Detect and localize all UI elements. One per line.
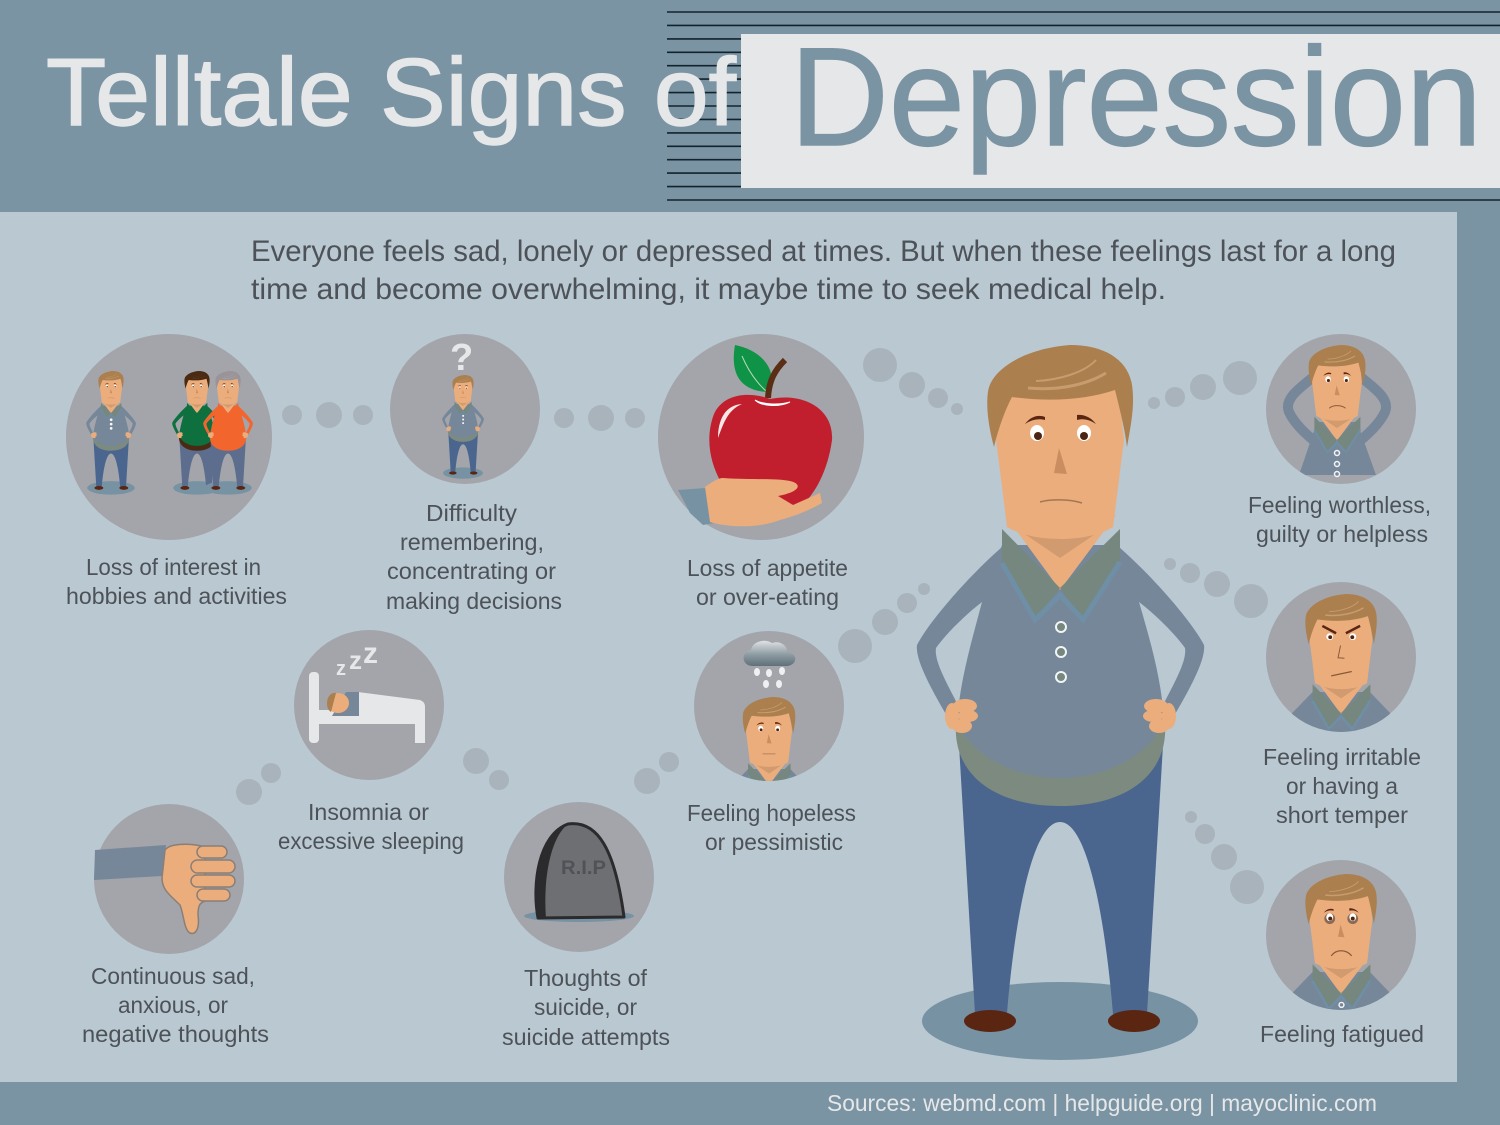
content panel [0, 212, 1457, 1082]
label: hobbies and activities [66, 583, 287, 609]
label [687, 555, 848, 610]
label: Feeling fatigued [1260, 1021, 1424, 1047]
label: Feeling worthless, [1248, 492, 1431, 518]
label: Feeling hopeless [687, 800, 856, 826]
icon: head [742, 697, 796, 781]
icon: green friend [172, 371, 222, 495]
icon: bed [309, 672, 425, 743]
intro text [251, 235, 1396, 306]
label [66, 554, 287, 609]
icon: rain cloud [744, 641, 795, 688]
icon: man holding head [1288, 345, 1386, 476]
icon: question mark: ? [450, 337, 473, 379]
label: guilty or helpless [1256, 521, 1428, 547]
label: or pessimistic [705, 829, 843, 855]
intro text: Everyone feels sad, lonely or depressed at times. But when these feelings last for a long [251, 235, 1396, 268]
icon: sleeping zzz: z [349, 645, 362, 675]
label: Feeling irritable [1263, 744, 1421, 770]
title: first part: Telltale Signs of [46, 39, 736, 146]
label [502, 965, 670, 1050]
panel: difficulty remembering [386, 334, 562, 614]
label: or having a [1286, 773, 1398, 799]
label: Loss of interest in [86, 554, 261, 580]
panel: fatigued [1262, 860, 1422, 1047]
icon: sleeping zzz: z [336, 658, 346, 680]
panel: insomnia [278, 630, 464, 854]
panel: loss of interest [66, 334, 287, 609]
icon: tombstone [524, 824, 634, 922]
title: Depression: Depression [790, 18, 1482, 175]
panel: worthless [1248, 334, 1431, 547]
label: negative thoughts [82, 1021, 269, 1047]
label [386, 500, 562, 614]
icon: tombstone: R.I.P [561, 858, 606, 879]
label: remembering, [400, 529, 544, 555]
thought-bubble dots [236, 348, 1268, 904]
panel: appetite [658, 334, 864, 610]
intro text: time and become overwhelming, it maybe time to seek medical help. [251, 273, 1166, 306]
panel: hopeless [688, 631, 856, 855]
icon: angry head [1292, 594, 1390, 732]
icon: lone man [86, 371, 136, 495]
icon: apple in hand [678, 345, 832, 526]
label: Continuous sad, [91, 963, 255, 989]
icon: tired head [1293, 874, 1390, 1010]
label: Thoughts of [524, 965, 648, 991]
sources: Sources: webmd.com | helpguide.org | mayoclinic.com [827, 1090, 1377, 1116]
icon: thumbs down [94, 844, 235, 933]
label [82, 963, 269, 1047]
label [687, 800, 856, 855]
icon: sleeping zzz [336, 637, 378, 680]
panel: suicide thoughts [502, 802, 670, 1050]
label: or over-eating [696, 584, 839, 610]
title [46, 18, 1482, 175]
label: Difficulty [426, 500, 518, 526]
label: suicide, or [534, 994, 637, 1020]
icon: small man [442, 375, 484, 479]
label [1248, 492, 1431, 547]
panel: negative thoughts [82, 804, 269, 1047]
title box [741, 34, 1500, 188]
label: making decisions [386, 588, 562, 614]
label: concentrating or [387, 558, 556, 584]
panel: irritable [1264, 582, 1420, 828]
label: suicide attempts [502, 1024, 670, 1050]
label: Loss of appetite [687, 555, 848, 581]
label [278, 799, 464, 854]
label [1263, 744, 1421, 828]
icon: sleeping zzz: z [363, 637, 378, 670]
label: short temper [1276, 802, 1408, 828]
label: anxious, or [118, 992, 228, 1018]
icon: orange friend [203, 371, 253, 495]
label: excessive sleeping [278, 828, 464, 854]
central figure [917, 345, 1204, 1060]
label: Insomnia or [308, 799, 429, 825]
